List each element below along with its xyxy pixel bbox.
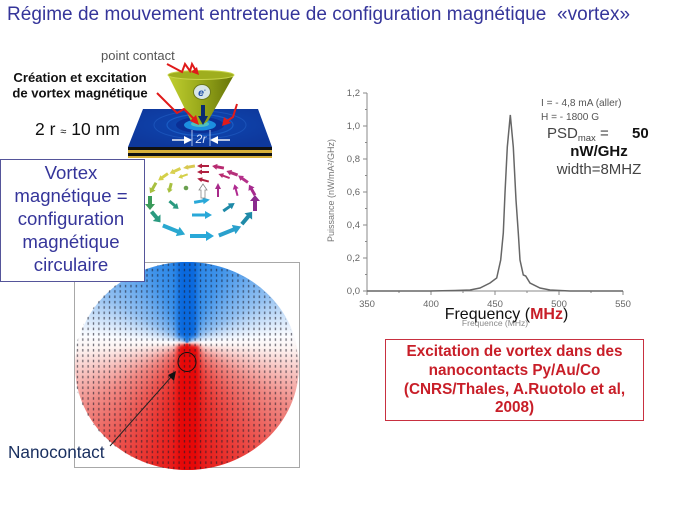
electron badge — [194, 84, 210, 100]
callout: excitation caption: nanocontacts Py/Au/Co — [429, 362, 600, 379]
nanocontact circle — [178, 352, 196, 372]
y tick labels: 0,8 — [347, 154, 360, 165]
chart: spectrum: 50 — [632, 125, 649, 142]
panel: vortex definition box — [0, 159, 145, 282]
PSD annotation: PSD — [547, 125, 578, 142]
blue plate with ripples — [128, 109, 272, 147]
dot grid — [74, 262, 298, 470]
PSD annotation: = — [596, 125, 609, 142]
cone — [168, 70, 234, 124]
chart: spectrum: H = - 1800 G — [541, 112, 599, 123]
panel: vortex definition box: circulaire — [34, 254, 108, 275]
y tick labels: 0,0 — [347, 286, 360, 297]
y tick labels: 0,6 — [347, 187, 360, 198]
label: creation and excitation: de vortex magnétique — [12, 86, 148, 100]
label: creation and excitation: Création et excitation — [13, 70, 147, 85]
label: nanocontact: Nanocontact — [8, 442, 105, 462]
axes — [363, 93, 623, 295]
PSD annotation: max — [578, 133, 596, 144]
inner arrows — [192, 211, 212, 219]
white core arrow — [199, 184, 207, 198]
x tick labels: 350 — [359, 299, 375, 310]
electron badge: e — [198, 87, 204, 99]
2r dimension: 2r — [195, 132, 207, 146]
panel: vortex definition box: magnétique — [22, 231, 120, 252]
y tick labels: 0,4 — [347, 220, 360, 231]
label: size 2r: 2 r ≈ 10 nm — [35, 119, 120, 139]
chart: spectrum: width=8MHZ — [556, 161, 641, 178]
callout: excitation caption — [385, 339, 644, 421]
frequency axis heading: Frequency (MHz) — [445, 306, 568, 323]
x tick labels: 400 — [423, 299, 439, 310]
y tick labels: 0,2 — [347, 253, 360, 264]
spectrum curve — [367, 115, 623, 291]
title: Régime de mouvement entretenue de configuration magnétique «vortex» — [7, 4, 630, 25]
x tick labels: 450 — [487, 299, 503, 310]
diagram: vortex arrows — [145, 163, 260, 241]
callout: excitation caption: 2008) — [495, 399, 534, 416]
arrow to nanocontact — [110, 371, 176, 446]
chart: spectrum: nW/GHz — [570, 143, 628, 160]
panel: vortex definition box: configuration — [18, 208, 124, 229]
x tick labels — [359, 299, 631, 310]
electron badge: - — [204, 88, 206, 94]
x axis small title: Frequence (MHz) — [462, 318, 528, 328]
panel: vortex simulation disc — [74, 262, 300, 468]
x tick labels: 500 — [551, 299, 567, 310]
chart: spectrum — [326, 88, 649, 328]
2r dimension — [172, 130, 230, 146]
stack — [128, 147, 272, 158]
measurement labels: I = - 4,8 mA (aller) — [541, 98, 622, 109]
callout: excitation caption: (CNRS/Thales, A.Ruotolo et al, — [404, 381, 625, 398]
outer ring — [190, 231, 214, 241]
panel: vortex definition box: magnétique = — [14, 185, 128, 206]
y tick labels: 1,0 — [347, 121, 360, 132]
x tick labels: 550 — [615, 299, 631, 310]
callout: excitation caption: Excitation de vortex dans des — [407, 343, 622, 360]
disc colour map — [75, 262, 299, 470]
panel: vortex definition box: Vortex — [45, 162, 97, 183]
label: point contact: point contact — [101, 48, 175, 63]
electron flow arrow — [198, 105, 208, 125]
y tick labels — [347, 88, 360, 297]
red current arrows — [157, 64, 237, 126]
y tick labels: 1,2 — [347, 88, 360, 99]
y axis title: Puissance (nW/mA²/GHz) — [326, 139, 336, 242]
